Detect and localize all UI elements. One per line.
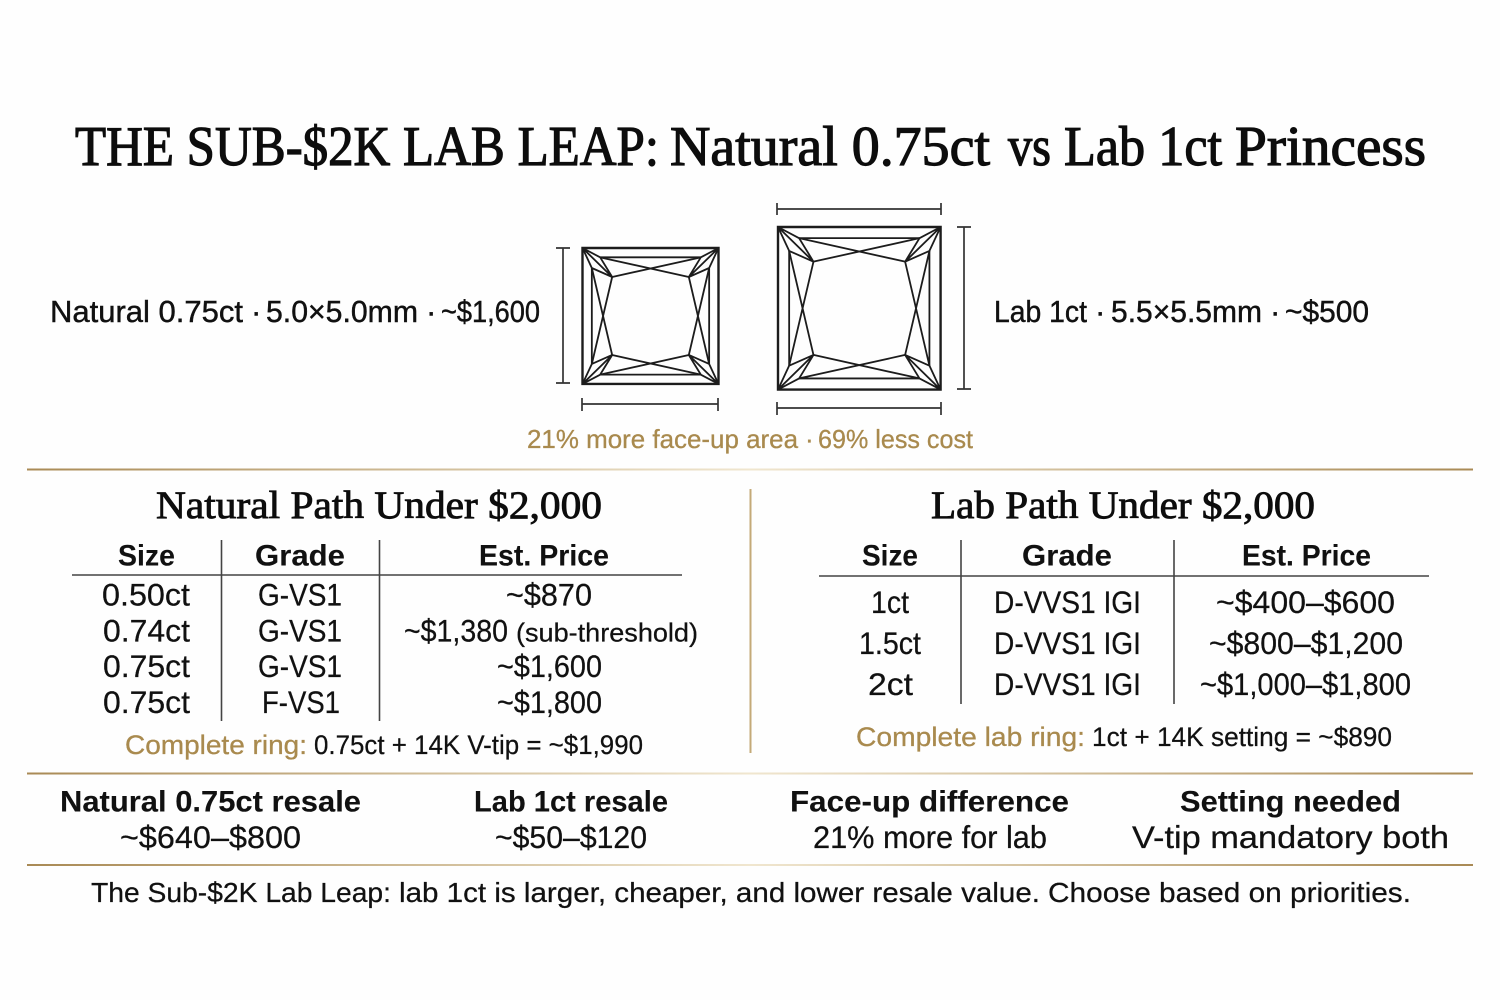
stat: face-up difference: 21% more for lab <box>813 819 1047 855</box>
table: natural options: 0.74ct <box>103 612 190 648</box>
label: natural diamond specs: · <box>426 294 436 329</box>
table: natural options: ~$1,600 <box>497 648 602 684</box>
label: lab diamond specs: ~$500 <box>1285 294 1369 329</box>
dimension bracket: lab bottom width <box>777 402 941 415</box>
table: lab options: D-VVS1 IGI <box>994 666 1141 702</box>
stat: setting needed: Setting needed <box>1180 786 1401 818</box>
table: natural options: Size <box>118 540 175 572</box>
callout: area and cost difference <box>527 424 974 454</box>
label: natural diamond specs: Natural 0.75ct <box>50 294 243 329</box>
stat: setting needed <box>1132 786 1449 855</box>
heading: natural path: Natural Path Under $2,000 <box>156 484 602 527</box>
stat: lab resale: Lab 1ct resale <box>474 786 668 818</box>
table: lab options: ~$800–$1,200 <box>1209 625 1403 661</box>
label: lab diamond specs: 5.5×5.5mm <box>1111 294 1262 329</box>
comparison: natural vs lab diamonds <box>50 203 1369 454</box>
note: complete natural ring: Complete ring: <box>125 730 307 760</box>
table: lab options: 2ct <box>868 666 913 702</box>
panel: natural path <box>72 484 698 760</box>
table: lab options: Grade <box>1022 540 1112 572</box>
table: lab options: 1ct <box>871 584 909 620</box>
footer summary: Choose based on priorities. <box>1048 877 1411 908</box>
table: lab options: D-VVS1 IGI <box>994 584 1141 620</box>
dimension bracket: natural width <box>582 398 718 411</box>
table: natural options: F-VS1 <box>262 684 340 720</box>
label: lab diamond specs: Lab 1ct <box>994 294 1087 329</box>
table: natural options: Est. Price <box>479 540 609 572</box>
title: vs <box>1008 116 1051 178</box>
table: natural options: Grade <box>255 540 345 572</box>
title: Natural 0.75ct <box>670 116 990 178</box>
label: lab diamond specs: · <box>1095 294 1105 329</box>
table: natural options: 0.75ct <box>103 648 190 684</box>
note: complete natural ring: 0.75ct + 14K V-tip = ~$1,990 <box>314 730 643 760</box>
title: THE SUB-$2K LAB LEAP: <box>75 116 659 178</box>
icon: lab princess-cut diamond <box>778 227 941 390</box>
note: complete lab ring <box>856 722 1392 752</box>
stat: natural resale <box>60 786 361 855</box>
table: lab options: Est. Price <box>1242 540 1371 572</box>
heading: lab path: Lab Path Under $2,000 <box>931 484 1315 527</box>
stat: natural resale: Natural 0.75ct resale <box>60 786 361 818</box>
footer summary <box>91 877 1411 908</box>
label: natural diamond specs: 5.0×5.0mm <box>266 294 418 329</box>
footer summary: lab 1ct is larger, cheaper, and lower resale value. <box>399 877 1040 908</box>
callout: area and cost difference: 21% more face-up area <box>527 424 799 454</box>
label: lab diamond specs: · <box>1270 294 1280 329</box>
stat: natural resale: ~$640–$800 <box>120 819 301 855</box>
dimension bracket: lab height <box>957 227 971 389</box>
table: natural options: ~$1,800 <box>497 684 602 720</box>
stat: face-up difference: Face-up difference <box>790 786 1069 818</box>
table: natural options: 0.75ct <box>103 684 190 720</box>
table: natural options: ~$1,380 <box>404 612 508 648</box>
panel: lab path <box>819 484 1429 752</box>
note: complete lab ring: 1ct + 14K setting = ~$890 <box>1092 722 1392 752</box>
table: lab options: ~$400–$600 <box>1216 584 1395 620</box>
table: natural options <box>72 540 698 721</box>
icon: natural princess-cut diamond <box>582 248 718 384</box>
dimension bracket: natural height <box>556 248 570 383</box>
callout: area and cost difference: 69% less cost <box>818 424 974 454</box>
dimension bracket: lab top width <box>777 203 941 215</box>
stat: face-up difference <box>790 786 1069 855</box>
label: natural diamond specs: · <box>251 294 261 329</box>
title: Lab 1ct <box>1064 116 1222 178</box>
table: natural options: (sub-threshold) <box>516 618 698 648</box>
table: lab options: Size <box>862 540 918 572</box>
label: natural diamond specs <box>50 294 540 329</box>
table: lab options <box>819 540 1429 704</box>
table: natural options: ~$870 <box>506 576 592 612</box>
title <box>75 116 1426 178</box>
label: lab diamond specs <box>994 294 1369 329</box>
callout: area and cost difference: · <box>805 424 814 454</box>
label: natural diamond specs: ~$1,600 <box>441 294 540 329</box>
stat: lab resale: ~$50–$120 <box>495 819 647 855</box>
table: natural options: G-VS1 <box>258 648 342 684</box>
table: lab options: ~$1,000–$1,800 <box>1200 666 1411 702</box>
footer summary: The Sub-$2K Lab Leap: <box>91 877 391 908</box>
table: natural options: G-VS1 <box>258 576 342 612</box>
table: lab options: 1.5ct <box>859 625 921 661</box>
note: complete natural ring <box>125 730 643 760</box>
note: complete lab ring: Complete lab ring: <box>856 722 1085 752</box>
table: lab options: D-VVS1 IGI <box>994 625 1141 661</box>
table: natural options: 0.50ct <box>102 576 190 612</box>
stat: setting needed: V-tip mandatory both <box>1132 819 1449 855</box>
table: natural options: G-VS1 <box>258 612 342 648</box>
stat: lab resale <box>474 786 668 855</box>
title: Princess <box>1235 116 1426 178</box>
